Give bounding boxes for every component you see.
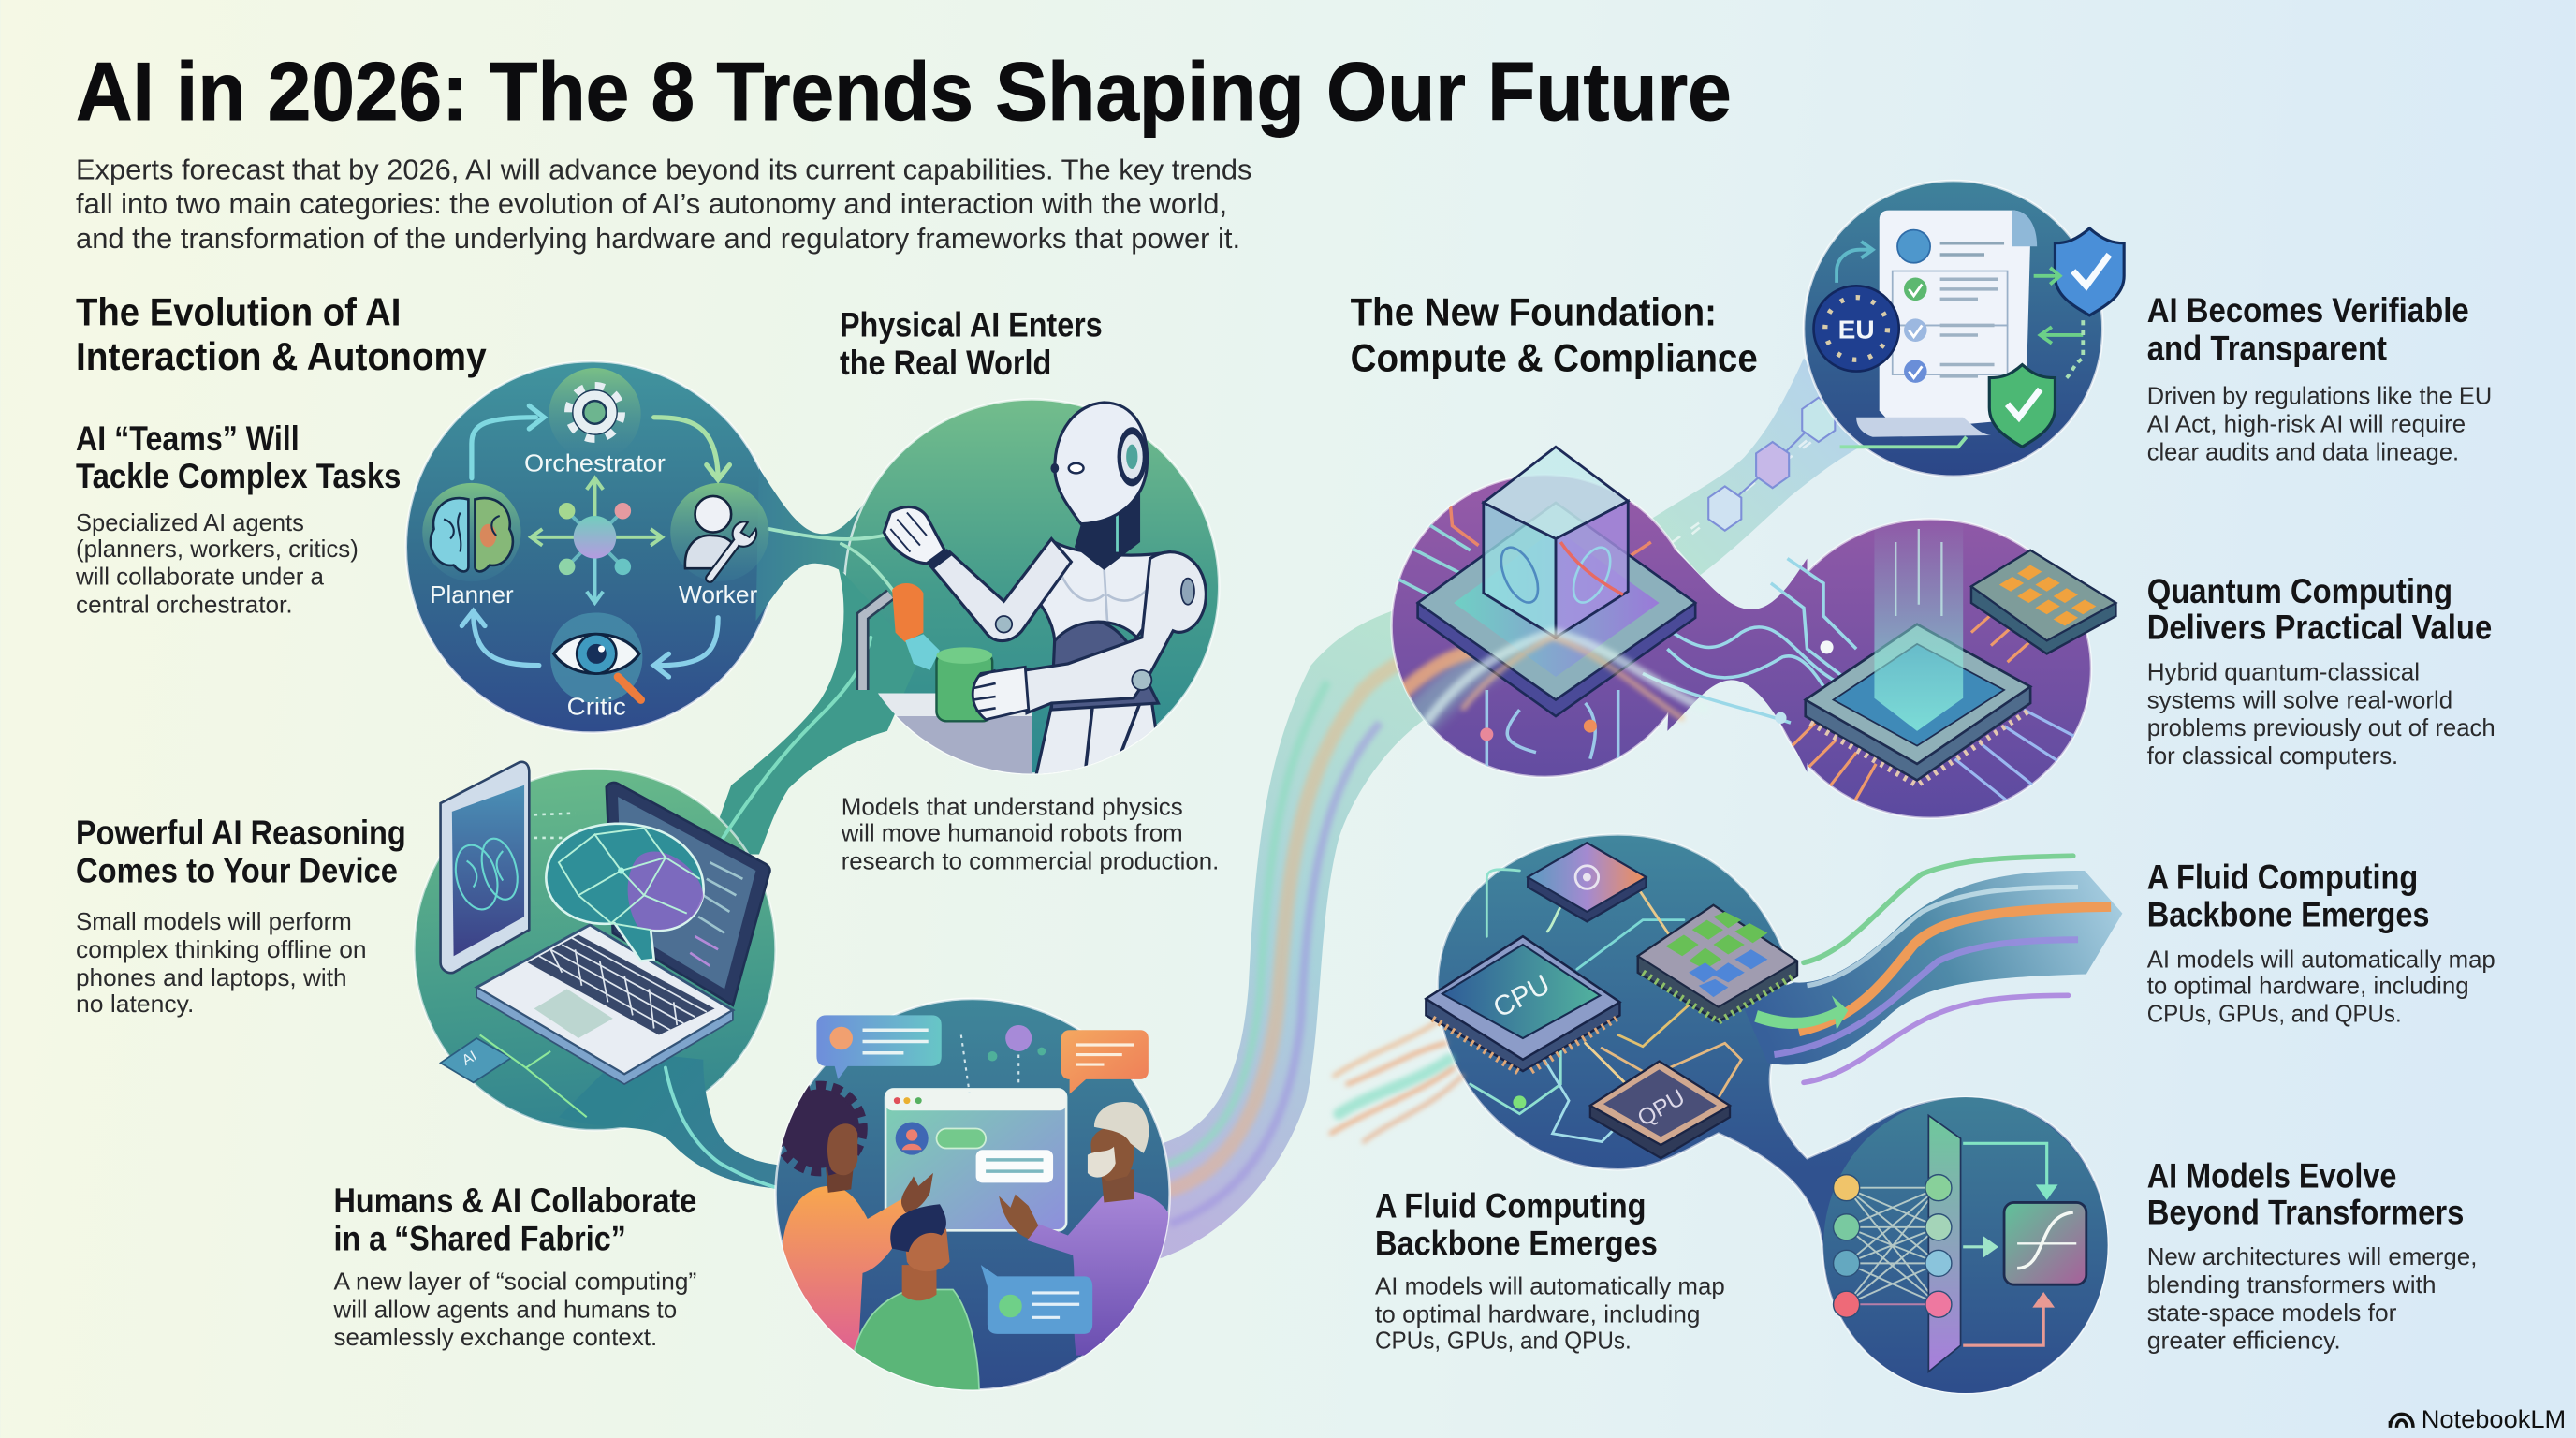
shared window bbox=[886, 1089, 1066, 1230]
function box bbox=[2004, 1202, 2086, 1284]
logo: NotebookLM: NotebookLM bbox=[2422, 1404, 2566, 1433]
text: physical AI body: Models that understand physics bbox=[842, 794, 1183, 820]
node: orchestrator gear: Orchestrator bbox=[524, 451, 666, 477]
text: reasoning body: phones and laptops, with bbox=[76, 965, 347, 991]
heading: fluid computing right: A Fluid Computing bbox=[2147, 858, 2418, 896]
robot right arm bbox=[1025, 552, 1206, 713]
robot torso bbox=[1022, 540, 1171, 640]
heading: fluid computing center: A Fluid Computing bbox=[1375, 1186, 1647, 1225]
arrows bbox=[1963, 1143, 2055, 1345]
chip: AI tag bbox=[441, 1038, 511, 1082]
icon: QPU chip bbox=[1590, 1062, 1730, 1158]
heading: fluid computing right: Backbone Emerges bbox=[2147, 896, 2430, 934]
heading: physical AI: the Real World bbox=[840, 344, 1051, 382]
heading: models evolve: Beyond Transformers bbox=[2147, 1193, 2464, 1231]
laptop screen bbox=[607, 783, 770, 1005]
intro paragraph: and the transformation of the underlying hardware and regulatory frameworks that power it. bbox=[76, 222, 1240, 255]
document bbox=[1856, 211, 2037, 437]
heading: reasoning on device: Comes to Your Device bbox=[76, 851, 398, 889]
text: fluid computing right body: to optimal hardware, including bbox=[2147, 974, 2469, 1000]
node: worker bbox=[670, 483, 769, 609]
panel: humans and AI bbox=[776, 999, 1170, 1397]
heading: humans and AI: Humans & AI Collaborate bbox=[334, 1181, 696, 1220]
node: critic eye: Critic bbox=[567, 694, 626, 720]
green shield bbox=[1989, 365, 2055, 447]
panel: physical AI blob bbox=[707, 399, 1219, 854]
text: physical AI body bbox=[841, 794, 1219, 874]
process arrows bbox=[1837, 242, 2083, 447]
heading: verifiable AI: AI Becomes Verifiable bbox=[2147, 291, 2469, 330]
text: AI teams body: central orchestrator. bbox=[76, 593, 293, 619]
text: humans and AI body: will allow agents and humans to bbox=[332, 1297, 677, 1323]
title: AI in 2026: The 8 Trends Shaping Our Future bbox=[76, 46, 1732, 138]
section heading: evolution of AI: The Evolution of AI bbox=[76, 289, 401, 333]
flow ribbon: people to cube bbox=[1150, 605, 1454, 1262]
heading: physical AI bbox=[840, 306, 1103, 382]
text: physical AI body: will move humanoid robots from bbox=[841, 820, 1183, 846]
machine and table bbox=[876, 693, 1032, 780]
green cup bbox=[936, 653, 992, 721]
text: reasoning body: no latency. bbox=[76, 991, 194, 1018]
laptop base bbox=[476, 925, 733, 1075]
connector: teams to robot bbox=[755, 468, 896, 633]
robot waist bbox=[1051, 620, 1158, 710]
robot lower body bbox=[1035, 705, 1157, 773]
heading: quantum bbox=[2147, 572, 2492, 647]
neural brain bbox=[546, 824, 704, 961]
chip: AI tag: AI bbox=[460, 1049, 479, 1069]
person left bbox=[777, 1086, 933, 1363]
text: verifiable AI body: Driven by regulations like the EU bbox=[2147, 384, 2492, 410]
cycle arrows bbox=[461, 405, 729, 677]
person right bbox=[999, 1102, 1169, 1356]
heading: reasoning on device bbox=[76, 814, 406, 889]
heading: fluid computing right bbox=[2147, 858, 2430, 934]
heading: quantum: Delivers Practical Value bbox=[2147, 609, 2492, 647]
text: fluid computing right body bbox=[2147, 947, 2496, 1027]
text: fluid computing right body: CPUs, GPUs, and QPUs. bbox=[2147, 1001, 2402, 1027]
panel: AI teams blob bbox=[406, 361, 896, 733]
text: reasoning body: complex thinking offline on bbox=[76, 937, 367, 963]
icon: quantum processor bbox=[1806, 519, 2030, 785]
panel: quantum blobs bbox=[1392, 475, 2091, 818]
robot hand bbox=[973, 667, 1029, 720]
heading: physical AI: Physical AI Enters bbox=[840, 306, 1103, 345]
section heading: new foundation: The New Foundation: bbox=[1351, 289, 1717, 333]
robot head bbox=[1055, 403, 1148, 524]
heading: fluid computing center: Backbone Emerges bbox=[1375, 1225, 1658, 1263]
icon: CPU chip: CPU bbox=[1488, 969, 1555, 1024]
text: quantum body: for classical computers. bbox=[2147, 743, 2398, 770]
panel: EU compliance circle bbox=[1804, 181, 2124, 477]
text: AI teams body: (planners, workers, critics) bbox=[76, 536, 359, 563]
hand right bbox=[999, 1195, 1038, 1239]
robot left arm bbox=[929, 539, 1071, 641]
section heading: evolution of AI: Interaction & Autonomy bbox=[76, 334, 487, 378]
heading: verifiable AI bbox=[2147, 291, 2469, 367]
text: quantum body: systems will solve real-world bbox=[2147, 687, 2452, 713]
illustration: humanoid robot bbox=[863, 403, 1206, 780]
EU badge bbox=[1814, 286, 1899, 372]
section heading: new foundation bbox=[1351, 289, 1758, 380]
node: critic eye bbox=[550, 613, 642, 720]
text: reasoning body: Small models will perform bbox=[76, 909, 352, 935]
connector lines bbox=[666, 529, 894, 1189]
text: verifiable AI body bbox=[2147, 384, 2492, 465]
text: fluid computing center body: CPUs, GPUs, and QPUs. bbox=[1375, 1328, 1632, 1355]
text: verifiable AI body: AI Act, high-risk AI will require bbox=[2147, 411, 2466, 437]
node: planner brain bbox=[422, 483, 521, 609]
connector: laptop to people bbox=[559, 1051, 792, 1189]
trackpad bbox=[534, 989, 613, 1038]
chat bubble bottom bbox=[981, 1265, 1092, 1334]
icon: GPU grid chip bbox=[1638, 905, 1797, 1021]
text: humans and AI body: seamlessly exchange context. bbox=[334, 1325, 657, 1351]
heading: models evolve: AI Models Evolve bbox=[2147, 1157, 2396, 1196]
text: fluid computing right body: AI models will automatically map bbox=[2147, 947, 2496, 974]
intro paragraph: Experts forecast that by 2026, AI will advance beyond its current capabilities. The key trends bbox=[76, 153, 1251, 185]
person center bbox=[851, 1204, 979, 1397]
node: worker: Worker bbox=[679, 582, 758, 609]
heading: quantum: Quantum Computing bbox=[2147, 572, 2452, 610]
text: models evolve body: New architectures will emerge, bbox=[2147, 1244, 2477, 1270]
text: quantum body: problems previously out of reach bbox=[2147, 715, 2496, 741]
node: green glow bbox=[1513, 1095, 1526, 1108]
text: humans and AI body bbox=[332, 1269, 696, 1351]
panel: fluid computing blob bbox=[1438, 834, 2108, 1393]
phone bbox=[441, 762, 529, 973]
icon: top chip bbox=[1528, 843, 1647, 921]
heading: humans and AI: in a “Shared Fabric” bbox=[334, 1219, 626, 1257]
text: fluid computing center body bbox=[1375, 1274, 1725, 1355]
text: physical AI body: research to commercial production. bbox=[842, 848, 1219, 874]
hub with arrows bbox=[531, 478, 662, 603]
section heading: evolution of AI bbox=[76, 289, 487, 378]
state plane bbox=[1928, 1115, 1961, 1372]
flow ribbon: cube to EU bbox=[1651, 359, 1873, 575]
hand left bbox=[901, 1173, 933, 1212]
robot left hand bbox=[884, 507, 944, 564]
connector: robot to laptop bbox=[707, 566, 920, 854]
text: quantum body bbox=[2147, 659, 2496, 770]
flow ribbon: fluid outputs bbox=[1741, 856, 2122, 1082]
heading: reasoning on device: Powerful AI Reasoning bbox=[76, 814, 406, 852]
flow arrow bbox=[1754, 995, 1848, 1030]
text: AI teams body: will collaborate under a bbox=[75, 565, 325, 591]
heading: AI teams: AI “Teams” Will bbox=[76, 419, 300, 458]
heading: AI teams: Tackle Complex Tasks bbox=[76, 457, 401, 495]
EU badge: EU bbox=[1838, 315, 1875, 344]
text: quantum body: Hybrid quantum-classical bbox=[2147, 659, 2420, 685]
icon: CPU chip bbox=[1426, 936, 1619, 1073]
intro paragraph: fall into two main categories: the evolution of AI’s autonomy and interaction with the world, bbox=[76, 187, 1227, 220]
diagram: agent team bbox=[422, 368, 769, 720]
icon: glass cube on chip bbox=[1418, 447, 1708, 723]
text: models evolve body: greater efficiency. bbox=[2147, 1328, 2341, 1355]
heading: AI teams bbox=[76, 419, 401, 495]
text: verifiable AI body: clear audits and data lineage. bbox=[2147, 439, 2459, 465]
text: models evolve body: blending transformers with bbox=[2147, 1272, 2437, 1299]
circuit traces: quantum bbox=[1398, 506, 2074, 801]
speech bubbles bbox=[816, 1015, 1149, 1094]
icon: small orange chip bbox=[1971, 550, 2115, 653]
heading: models evolve bbox=[2147, 1157, 2464, 1231]
blue shield bbox=[2055, 228, 2124, 315]
text: AI teams body: Specialized AI agents bbox=[76, 510, 304, 536]
illustration: phone and laptop bbox=[441, 762, 770, 1117]
text: AI teams body bbox=[75, 510, 359, 619]
keyboard bbox=[528, 934, 715, 1034]
heading: humans and AI bbox=[334, 1181, 696, 1257]
text: fluid computing center body: AI models will automatically map bbox=[1375, 1274, 1725, 1300]
left wires into CPU bbox=[1331, 1021, 1462, 1142]
icon: data block chain bbox=[1708, 398, 1835, 531]
chip wiring bbox=[1471, 870, 1741, 1142]
node: orchestrator gear bbox=[524, 368, 666, 477]
text: models evolve body: state-space models for bbox=[2147, 1300, 2397, 1327]
intro paragraph bbox=[76, 153, 1251, 255]
section heading: new foundation: Compute & Compliance bbox=[1351, 336, 1758, 380]
text: humans and AI body: A new layer of “social computing” bbox=[334, 1269, 696, 1295]
heading: fluid computing center bbox=[1375, 1186, 1658, 1263]
node: planner brain: Planner bbox=[430, 582, 514, 609]
text: fluid computing center body: to optimal hardware, including bbox=[1375, 1302, 1700, 1328]
text: reasoning body bbox=[76, 909, 367, 1018]
diagram: neural network to state space bbox=[1834, 1115, 2086, 1372]
robot neck bbox=[1075, 486, 1140, 570]
heading: verifiable AI: and Transparent bbox=[2147, 329, 2387, 367]
icon: QPU chip: QPU bbox=[1633, 1085, 1690, 1132]
panel: on-device blob bbox=[414, 769, 792, 1189]
text: models evolve body bbox=[2147, 1244, 2477, 1355]
